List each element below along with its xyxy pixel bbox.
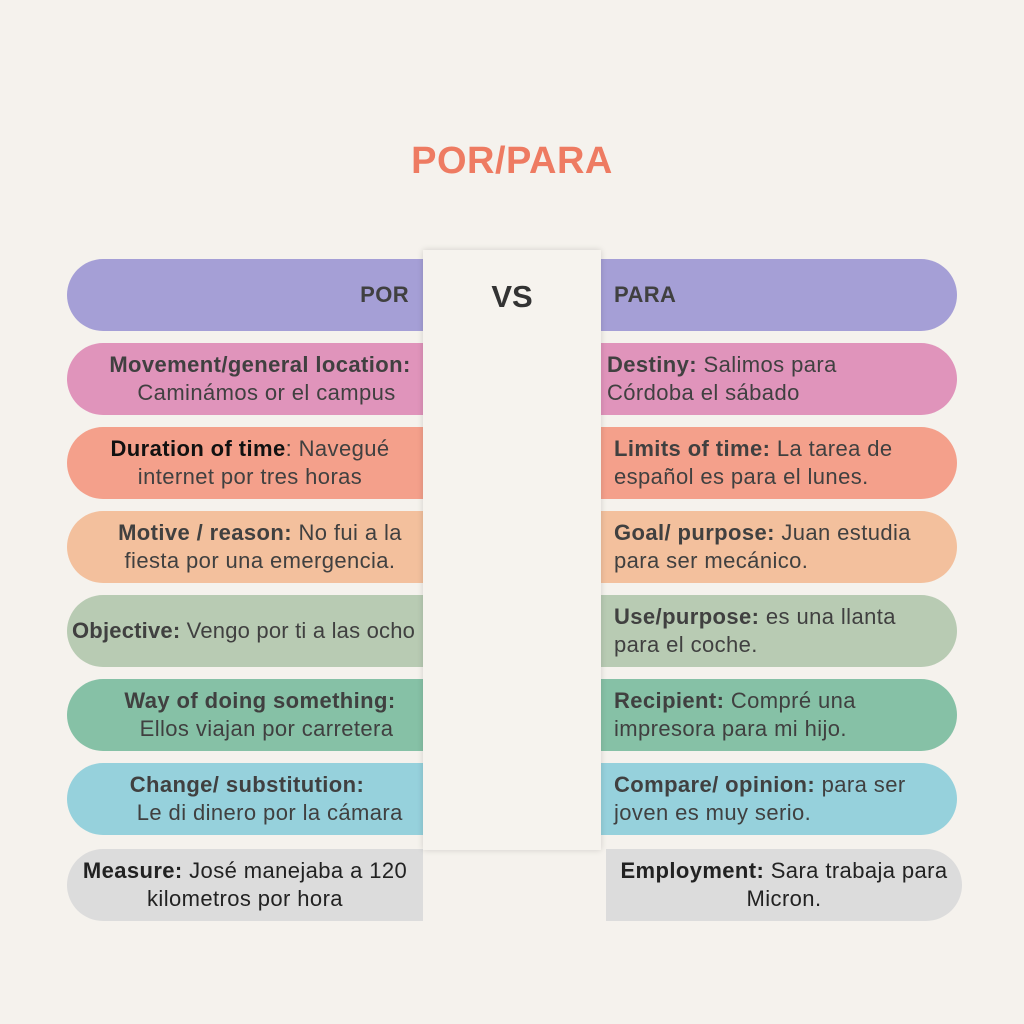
por row 2: internet por tres horas [138,464,362,489]
para row 7: Micron. [747,886,821,911]
por row 6: Change/ substitution: [130,772,364,797]
para row 7: Employment: Sara trabaja para [620,858,948,883]
para row 1: Destiny: Salimos para [607,352,837,377]
para row 1 [601,343,957,415]
header: para: PARA [614,282,676,307]
vs label: VS [491,279,533,314]
por row 5 [67,679,423,751]
para row 2: Limits of time: La tarea de [614,436,893,461]
por row 2 [67,427,423,499]
para row 1: Córdoba el sábado [607,380,800,405]
por row 7: kilometros por hora [147,886,343,911]
para row 4: para el coche. [614,632,758,657]
para row 3: Goal/ purpose: Juan estudia [614,520,911,545]
por row 7 [67,849,423,921]
por row 1: Caminámos or el campus [137,380,396,405]
para row 4 [601,595,957,667]
center divider panel [423,250,601,850]
por row 3 [67,511,423,583]
header: por: POR [360,282,409,307]
por row 1: Movement/general location: [109,352,411,377]
para row 6 [601,763,957,835]
por row 3: fiesta por una emergencia. [125,548,395,573]
para row 3 [601,511,957,583]
por row 4 [67,595,423,667]
para row 6: joven es muy serio. [614,800,811,825]
header: para [601,259,957,331]
para row 6: Compare/ opinion: para ser [614,772,906,797]
por row 2: Duration of time: Navegué [111,436,389,461]
por row 4: Objective: Vengo por ti a las ocho [72,618,415,643]
para row 2: español es para el lunes. [614,464,869,489]
por row 6 [67,763,423,835]
por row 1 [67,343,423,415]
para row 3: para ser mecánico. [614,548,808,573]
para row 5 [601,679,957,751]
por row 7: Measure: José manejaba a 120 [83,858,407,883]
por row 5: Way of doing something: [124,688,396,713]
por row 3: Motive / reason: No fui a la [118,520,402,545]
para row 7 [606,849,962,921]
title: POR/PARA [411,140,613,182]
para row 4: Use/purpose: es una llanta [614,604,896,629]
para row 2 [601,427,957,499]
para row 5: impresora para mi hijo. [614,716,847,741]
por row 5: Ellos viajan por carretera [140,716,393,741]
por row 6: Le di dinero por la cámara [137,800,403,825]
header: por [67,259,423,331]
para row 5: Recipient: Compré una [614,688,856,713]
